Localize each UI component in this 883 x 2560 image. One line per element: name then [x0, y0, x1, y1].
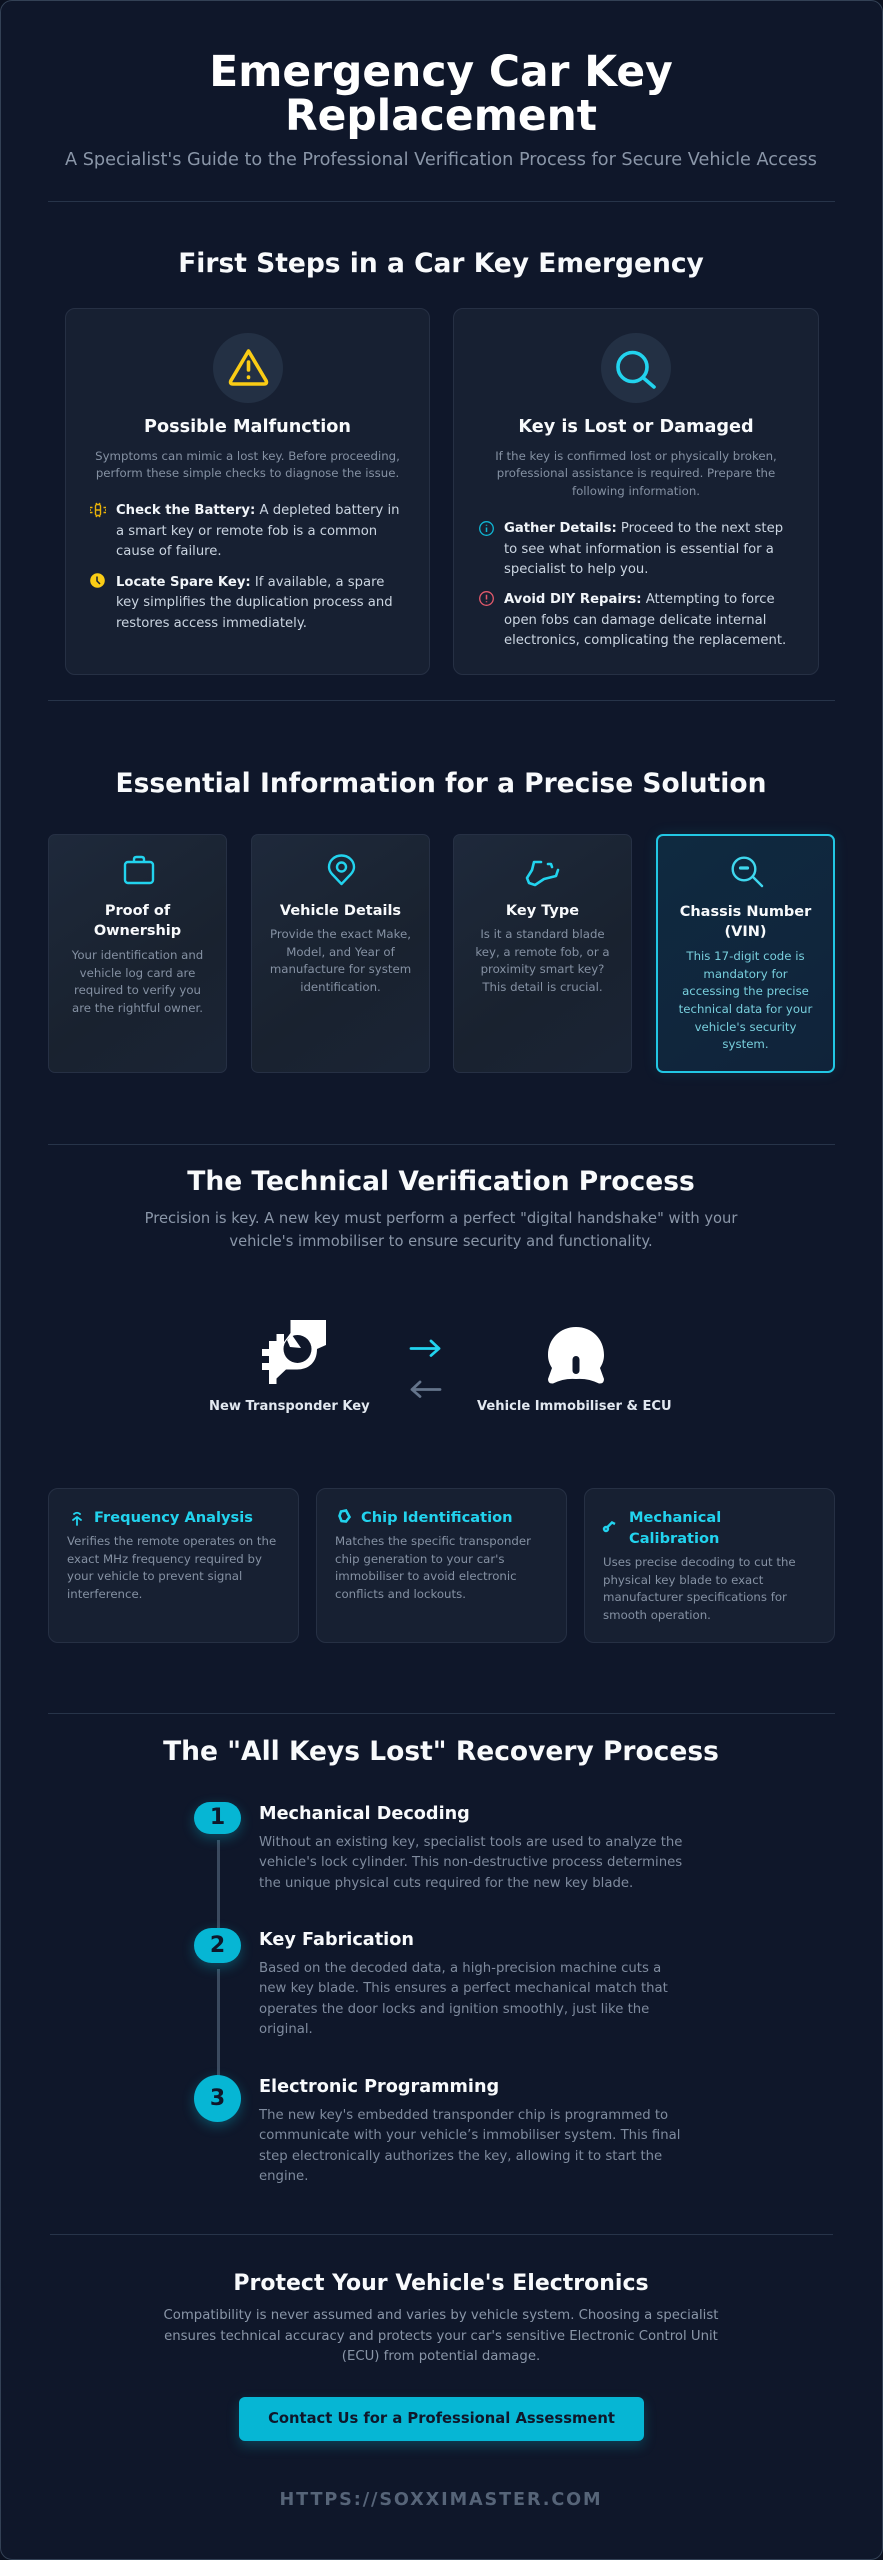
check the battery	[116, 503, 400, 559]
title	[209, 46, 673, 140]
panel: vehicle details	[251, 834, 430, 1073]
label: new transponder key: New Transponder Key	[209, 1399, 370, 1414]
card description: If the key is confirmed lost or physically broken,	[495, 448, 777, 462]
description: Is it a standard blade	[480, 927, 605, 941]
footer call to action	[1, 2266, 881, 2516]
panel: key lost or damaged	[453, 308, 819, 675]
card description: perform these simple checks to diagnose the issue.	[96, 466, 399, 480]
description: system.	[722, 1037, 769, 1051]
description: interference.	[67, 1587, 142, 1601]
intro text: Precision is key. A new key must perform a perfect "digital handshake" with your	[145, 1210, 737, 1227]
step 1 badge	[194, 1802, 241, 1834]
step 1 text	[259, 1834, 682, 1891]
footer text: (ECU) from potential damage.	[342, 2349, 540, 2364]
description	[475, 927, 610, 994]
step 3 text	[259, 2106, 680, 2188]
description: Uses precise decoding to cut the	[603, 1555, 796, 1569]
card description	[95, 448, 400, 480]
step 2	[190, 1926, 668, 2037]
description: proximity smart key?	[481, 962, 604, 976]
gather details: to see what information is essential for a	[504, 542, 774, 557]
gather details: Gather Details: Proceed to the next step	[504, 521, 783, 536]
title: Mechanical	[629, 1509, 721, 1526]
title: Replacement	[285, 91, 597, 140]
intro text	[145, 1210, 738, 1250]
description: This 17-digit code is	[686, 949, 805, 963]
step 1 text: Without an existing key, specialist tools are used to analyze the	[259, 1834, 682, 1850]
icon: info	[479, 521, 494, 536]
gather details: specialist to help you.	[504, 562, 648, 577]
check the battery: cause of failure.	[116, 544, 222, 559]
description: manufacturer specifications for	[603, 1590, 787, 1604]
footer text: ensures technical accuracy and protects your car's sensitive Electronic Control Unit	[164, 2329, 718, 2344]
title	[94, 903, 181, 939]
description: Verifies the remote operates on the	[67, 1534, 276, 1548]
description: Your identification and	[72, 948, 203, 962]
title: Key Type	[506, 903, 579, 919]
step 2 text: original.	[259, 2022, 313, 2037]
heading: technical verification: The Technical Verification Process	[187, 1166, 695, 1197]
gather details	[504, 521, 783, 577]
title: Chip Identification	[361, 1509, 512, 1526]
title: Proof of	[105, 903, 170, 919]
locate spare key	[116, 574, 393, 631]
description: immobiliser to avoid electronic	[335, 1569, 517, 1583]
avoid DIY repairs: open fobs can damage delicate internal	[504, 613, 766, 628]
icon: antenna	[72, 1512, 82, 1526]
contact button: Contact Us for a Professional Assessment	[268, 2410, 615, 2427]
description: key, a remote fob, or a	[475, 945, 610, 959]
description	[67, 1534, 276, 1601]
description: your vehicle to prevent signal	[67, 1569, 242, 1583]
icon: wrench	[602, 1521, 616, 1532]
panel: chip identification	[316, 1488, 567, 1643]
title: Vehicle Details	[280, 903, 401, 919]
description	[603, 1555, 796, 1622]
avoid DIY repairs: electronics, complicating the replacement.	[504, 633, 786, 648]
description: are the rightful owner.	[72, 1001, 203, 1015]
description	[72, 948, 203, 1015]
description: conflicts and lockouts.	[335, 1587, 466, 1601]
step 1 text: the unique physical cuts required for the new key blade.	[259, 1876, 633, 1891]
panel: frequency analysis	[48, 1488, 299, 1643]
description: Provide the exact Make,	[270, 927, 411, 941]
arrow: outgoing signal	[410, 1340, 440, 1357]
panel: proof of ownership	[48, 834, 227, 1073]
description	[678, 949, 812, 1051]
title: (VIN)	[724, 924, 766, 940]
timeline: recovery steps	[217, 1840, 220, 2076]
icon: briefcase	[124, 856, 154, 884]
title	[680, 904, 812, 940]
locate spare key: Locate Spare Key: If available, a spare	[116, 574, 384, 590]
heading: first steps: First Steps in a Car Key Emergency	[178, 248, 704, 279]
heading: essential information: Essential Information for a Precise Solution	[116, 768, 766, 799]
step 3 text: The new key's embedded transponder chip is programmed to	[259, 2108, 668, 2122]
description: Model, and Year of	[286, 945, 395, 959]
step 3 text: engine.	[259, 2169, 308, 2184]
step 2 badge: 2	[210, 1933, 225, 1958]
footer text: Compatibility is never assumed and varies by vehicle system. Choosing a specialist	[164, 2308, 718, 2323]
icon: location pin	[328, 854, 356, 886]
step 3	[191, 2075, 701, 2190]
description: accessing the precise	[682, 984, 809, 998]
diagram: digital handshake	[209, 1320, 672, 1414]
step 3 title: Electronic Programming	[259, 2077, 499, 2097]
footer text	[1, 2306, 881, 2368]
icon: warning triangle	[213, 333, 283, 403]
website url: HTTPS://SOXXIMASTER.COM	[279, 2490, 602, 2510]
arrow: return signal	[410, 1380, 442, 1398]
card title: Possible Malfunction	[144, 416, 351, 436]
icon: clock	[90, 573, 105, 588]
description: This detail is crucial.	[482, 980, 603, 994]
check the battery: Check the Battery: A depleted battery in	[116, 503, 400, 518]
icon: magnifier with minus	[732, 856, 764, 888]
title	[629, 1509, 721, 1547]
icon: chip	[338, 1509, 351, 1523]
description: required to verify you	[74, 983, 201, 997]
label: vehicle immobiliser: Vehicle Immobiliser & ECU	[477, 1399, 672, 1414]
step 2 text	[259, 1960, 668, 2037]
title: Calibration	[629, 1530, 719, 1547]
panel: mechanical calibration	[584, 1488, 835, 1643]
step 1 badge: 1	[210, 1805, 225, 1830]
description: physical key blade to exact	[603, 1573, 763, 1587]
description	[335, 1534, 531, 1601]
description: mandatory for	[703, 967, 788, 981]
step 3 badge: 3	[210, 2086, 225, 2111]
avoid DIY repairs	[504, 592, 786, 648]
step 3 text: step electronically authorizes the key, allowing it to start the	[259, 2149, 662, 2164]
title: Emergency Car Key	[209, 46, 673, 96]
description: vehicle's security	[695, 1020, 796, 1034]
icon: magnifier	[601, 333, 671, 403]
card description: professional assistance is required. Prepare the	[497, 466, 775, 480]
locate spare key: key simplifies the duplication process and	[116, 595, 393, 610]
panel: possible malfunction	[65, 308, 430, 675]
icon: key squiggle	[526, 860, 560, 886]
icon: battery check	[90, 502, 106, 518]
subtitle: A Specialist's Guide to the Professional Verification Process for Secure Vehicle Access	[65, 150, 817, 170]
description	[270, 927, 411, 994]
step 2 text: operates the door locks and ignition smoothly, just like the	[259, 2002, 649, 2017]
description: chip generation to your car's	[335, 1552, 505, 1566]
icon: immobiliser	[548, 1327, 604, 1384]
check the battery: a smart key or remote fob is a common	[116, 524, 377, 539]
description: identification.	[300, 980, 381, 994]
avoid DIY repairs: Avoid DIY Repairs: Attempting to force	[504, 592, 775, 607]
heading: protect electronics: Protect Your Vehicle's Electronics	[233, 2271, 649, 2296]
icon: alert	[479, 591, 494, 606]
panel: key type	[453, 834, 632, 1073]
intro text: vehicle's immobiliser to ensure security and functionality.	[229, 1233, 653, 1250]
step 2 badge	[194, 1928, 241, 1963]
card description	[495, 448, 777, 498]
step 1 title: Mechanical Decoding	[259, 1804, 470, 1824]
description: vehicle log card are	[80, 966, 195, 980]
contact button	[239, 2397, 644, 2441]
title: Frequency Analysis	[94, 1509, 253, 1526]
step 1	[190, 1800, 682, 1891]
step 2 text: new key blade. This ensures a perfect mechanical match that	[259, 1981, 668, 1996]
card title: Key is Lost or Damaged	[518, 416, 754, 436]
card description: Symptoms can mimic a lost key. Before proceeding,	[95, 448, 400, 462]
panel: chassis number, highlighted	[656, 834, 835, 1073]
heading: all keys lost: The "All Keys Lost" Recovery Process	[163, 1736, 719, 1767]
step 3 text: communicate with your vehicle’s immobiliser system. This final	[259, 2128, 680, 2143]
icon: transponder key	[262, 1320, 326, 1384]
step 2 text: Based on the decoded data, a high-precision machine cuts a	[259, 1960, 661, 1976]
description: exact MHz frequency required by	[67, 1552, 262, 1566]
header	[65, 46, 817, 170]
card description: following information.	[572, 484, 700, 498]
locate spare key: restores access immediately.	[116, 616, 307, 631]
description: smooth operation.	[603, 1608, 711, 1622]
step 2 title: Key Fabrication	[259, 1930, 414, 1950]
step 1 text: vehicle's lock cylinder. This non-destructive process determines	[259, 1855, 682, 1870]
title: Ownership	[94, 923, 181, 939]
description: Matches the specific transponder	[335, 1534, 531, 1548]
title: Chassis Number	[680, 904, 811, 920]
description: manufacture for system	[270, 962, 411, 976]
description: technical data for your	[679, 1002, 812, 1016]
step 3 badge	[194, 2075, 241, 2122]
